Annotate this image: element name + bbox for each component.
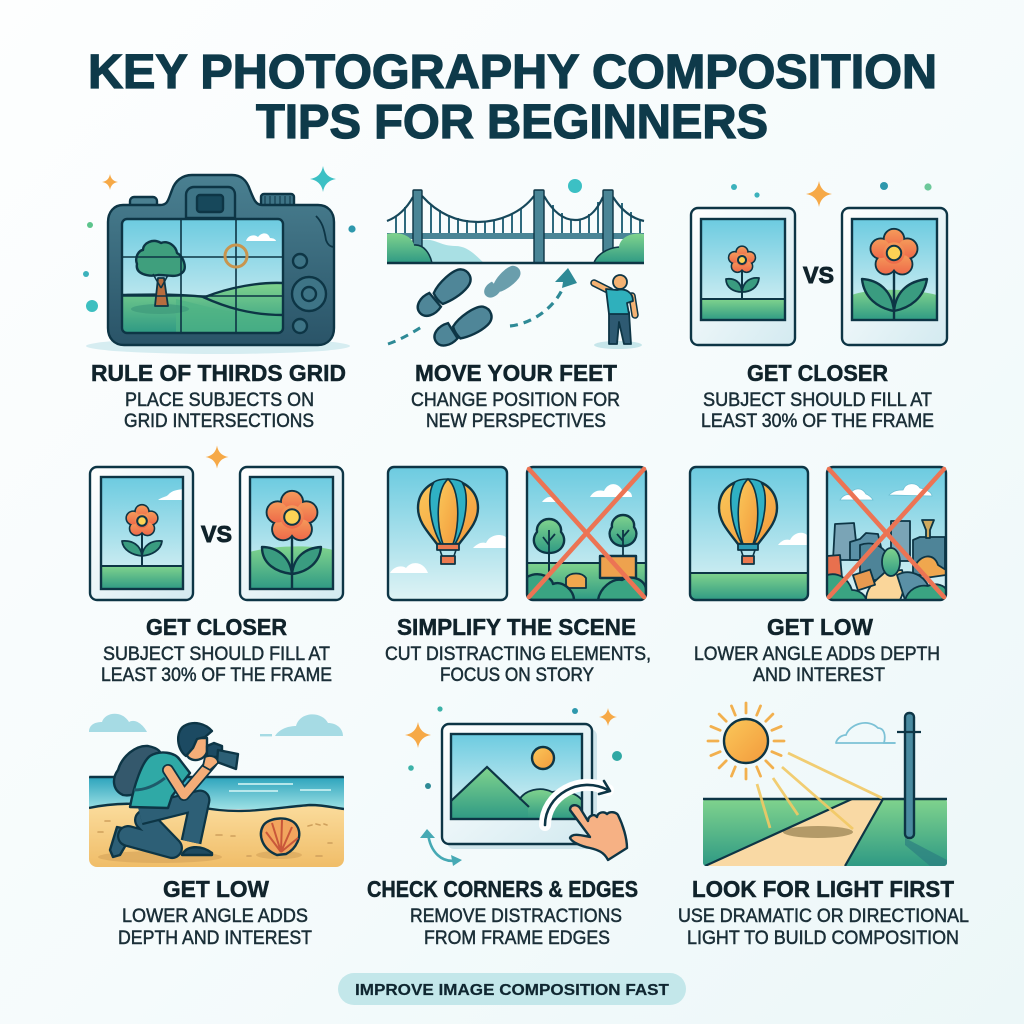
- text: get low description: AND INTEREST: [753, 665, 885, 686]
- panel: get low bottom: [89, 714, 344, 949]
- heading: look for light first: LOOK FOR LIGHT FIRST: [692, 876, 954, 902]
- text: get low description: DEPTH AND INTEREST: [118, 928, 312, 949]
- icon: clean balloon photo: [388, 467, 507, 600]
- heading: check corners and edges: CHECK CORNERS & EDGES: [367, 876, 638, 902]
- icon: sparkle and dots: [731, 181, 932, 207]
- icon: sun field and pole: [703, 703, 947, 866]
- text: get low description: [118, 906, 312, 949]
- text: get closer description: LEAST 30% OF THE FRAME: [101, 665, 332, 686]
- icon: seashell: [261, 818, 299, 855]
- panel: get closer middle: [90, 446, 343, 686]
- panel: check corners and edges: [367, 706, 638, 949]
- panel: simplify the scene: [385, 467, 651, 686]
- text: check corners description: REMOVE DISTRACTIONS: [410, 906, 622, 927]
- arrow: dashed direction: [510, 268, 577, 326]
- heading: move your feet: MOVE YOUR FEET: [415, 360, 617, 386]
- text: get closer description: SUBJECT SHOULD FILL AT: [103, 644, 330, 665]
- text: look for light description: LIGHT TO BUILD COMPOSITION: [687, 928, 959, 949]
- heading: rule of thirds grid: RULE OF THIRDS GRID: [91, 360, 346, 386]
- text: get low description: LOWER ANGLE ADDS DEPTH: [694, 644, 940, 665]
- panel: move your feet: [387, 179, 644, 432]
- text: move your feet description: NEW PERSPECTIVES: [426, 411, 606, 432]
- panel: rule of thirds grid: [83, 166, 356, 432]
- text: get low description: LOWER ANGLE ADDS: [122, 906, 308, 927]
- text: vs: VS: [803, 262, 834, 288]
- icon: footprints: [388, 262, 524, 350]
- heading: get closer: GET CLOSER: [146, 614, 287, 640]
- title: KEY PHOTOGRAPHY COMPOSITION: [88, 46, 937, 99]
- icon: photographer: [110, 723, 238, 857]
- icon: small flower frame: [90, 467, 193, 600]
- text: get low description: [694, 644, 940, 686]
- text: move your feet description: CHANGE POSITION FOR: [411, 390, 620, 411]
- text: simplify description: FOCUS ON STORY: [440, 665, 594, 686]
- text: move your feet description: [411, 390, 620, 432]
- text: get closer description: [101, 644, 332, 686]
- panel: look for light first: [678, 703, 969, 949]
- text: vs: VS: [201, 521, 232, 547]
- icon: framed photo with hand: [442, 724, 627, 860]
- icon: person pointing: [594, 275, 642, 349]
- title: TIPS FOR BEGINNERS: [256, 96, 768, 149]
- text: get closer description: SUBJECT SHOULD FILL AT: [703, 390, 932, 411]
- text: get closer description: [701, 390, 934, 432]
- text: check corners description: [410, 906, 622, 949]
- text: rule of thirds description: [124, 390, 314, 432]
- icon: sparkle: [206, 446, 228, 468]
- footer pill: IMPROVE IMAGE COMPOSITION FAST: [355, 982, 669, 999]
- text: rule of thirds description: GRID INTERSECTIONS: [124, 411, 314, 432]
- icon: camera with grid: [83, 166, 356, 354]
- icon: cluttered city crossed out: [827, 467, 946, 600]
- heading: simplify the scene: SIMPLIFY THE SCENE: [397, 614, 636, 640]
- text: rule of thirds description: PLACE SUBJECTS ON: [125, 390, 314, 411]
- text: check corners description: FROM FRAME EDGES: [424, 928, 610, 949]
- icon: balloon over ground: [690, 467, 808, 600]
- panel: get closer top: [691, 181, 947, 432]
- arrow: curved rotate: [420, 829, 462, 866]
- text: get closer description: LEAST 30% OF THE FRAME: [701, 411, 934, 432]
- heading: get low: GET LOW: [163, 876, 269, 902]
- icon: cluttered scene crossed out: [527, 467, 646, 600]
- icon: sparkles and dots: [405, 706, 622, 789]
- text: simplify description: CUT DISTRACTING ELEMENTS,: [385, 644, 651, 665]
- heading: get closer: GET CLOSER: [747, 360, 888, 386]
- panel: get low middle: [690, 467, 946, 686]
- icon: large flower frame: [240, 467, 343, 600]
- footer pill: [338, 973, 686, 1005]
- heading: get low: GET LOW: [767, 614, 873, 640]
- title: [88, 46, 937, 149]
- icon: small flower frame: [691, 208, 795, 345]
- text: look for light description: [678, 906, 969, 949]
- icon: suspension bridge: [387, 179, 644, 263]
- text: look for light description: USE DRAMATIC OR DIRECTIONAL: [678, 906, 969, 927]
- icon: beach scene: [89, 714, 344, 867]
- icon: large flower frame: [842, 208, 947, 345]
- text: simplify description: [385, 644, 651, 686]
